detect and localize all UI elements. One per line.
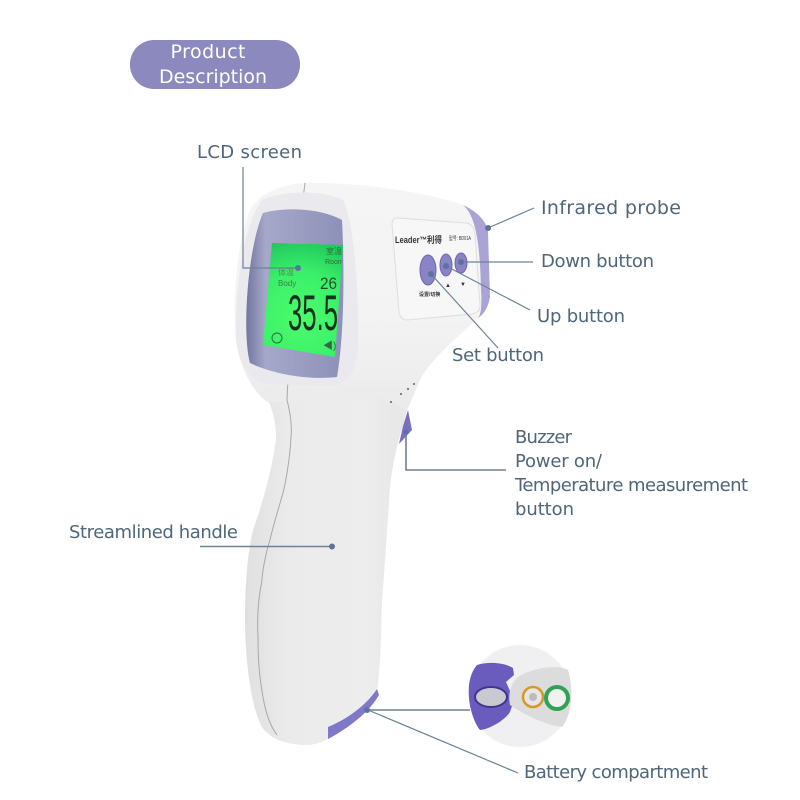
leader lines: [200, 167, 534, 773]
button panel: ▼: [460, 282, 466, 288]
battery inset: [469, 645, 571, 747]
bottom cap: [328, 689, 379, 739]
badge: Product Description: [130, 40, 300, 89]
LCD green screen: Body: [278, 279, 296, 288]
label: Buzzer and power button: Buzzer: [515, 427, 573, 448]
label: Buzzer and power button: Temperature measurement: [514, 475, 748, 496]
set button: [420, 255, 436, 285]
label: Set button: Set button: [452, 345, 544, 366]
button panel: ▲: [445, 283, 451, 289]
battery compartment: [509, 667, 571, 727]
LCD green screen: 体温: [278, 267, 294, 277]
label: Streamlined handle: Streamlined handle: [69, 522, 238, 543]
handle body: [245, 370, 420, 745]
LCD window: [246, 209, 343, 378]
button panel: 型号: BD01A: [449, 235, 472, 242]
label: Down button: Down button: [541, 251, 654, 272]
label: Up button: Up button: [537, 306, 625, 327]
trigger: [399, 410, 412, 444]
LCD bezel: [236, 192, 358, 386]
label: Buzzer and power button: button: [515, 499, 574, 520]
label: LCD screen: LCD screen: [197, 142, 302, 163]
button panel: 设置/切换: [419, 291, 440, 298]
label: Buzzer and power button: Power on/: [515, 451, 603, 472]
up button: [440, 254, 452, 276]
label: Infrared probe: Infrared probe: [541, 197, 681, 219]
button panel: Leader™利得: [395, 234, 442, 245]
badge: Product Description: Description: [159, 66, 267, 88]
button panel: [392, 218, 480, 320]
LCD green screen: [263, 243, 344, 357]
LCD green screen: Room: [325, 259, 344, 266]
down button: [455, 253, 467, 273]
seam lines: [258, 183, 305, 735]
LCD green screen: 35.5: [288, 285, 338, 341]
LCD green screen: 26: [320, 274, 337, 293]
probe ring: [463, 205, 490, 318]
head: [235, 183, 481, 410]
battery cover: [469, 663, 514, 730]
label: Battery compartment: Battery compartment: [524, 762, 708, 783]
thermometer illustration: [235, 183, 490, 745]
LCD green screen: ◀): [323, 340, 336, 352]
leader dots: [295, 225, 491, 713]
buzzer holes: [390, 383, 415, 403]
badge: Product Description: Product: [170, 41, 246, 63]
LCD green screen: 室温: [326, 246, 342, 256]
label: Buzzer and power button: [514, 427, 748, 520]
